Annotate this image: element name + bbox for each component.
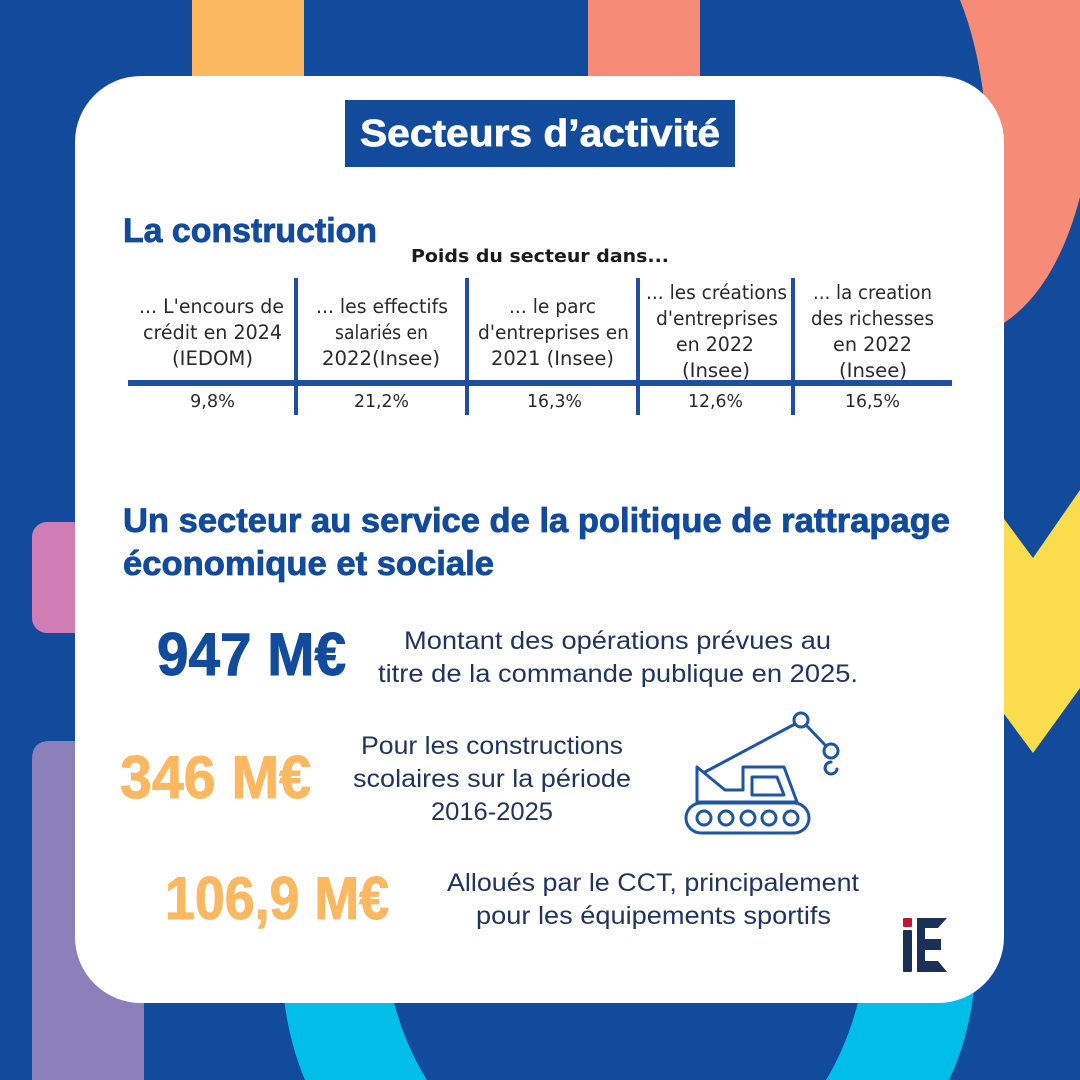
heading: La construction: La construction <box>123 212 377 250</box>
column 4 <box>646 281 787 412</box>
heading: politique de rattrapage <box>123 502 950 583</box>
panel: white card <box>75 76 1004 1003</box>
stat: 106,9 M€: 106,9 M€ <box>165 865 389 932</box>
column 1: (IEDOM) <box>172 347 253 370</box>
table rules <box>128 278 952 415</box>
column 5: (Insee) <box>839 359 907 382</box>
text: constructions scolaires: Pour les constructions <box>361 732 623 760</box>
column 1: crédit en 2024 <box>143 321 282 344</box>
text: constructions scolaires <box>353 732 631 826</box>
text: CCT: pour les équipements sportifs <box>476 902 831 930</box>
column 4: ... les créations <box>646 281 787 304</box>
stat: 947 M€: 947 M€ <box>157 621 346 688</box>
title: Secteurs d’activité <box>360 113 720 155</box>
text: CCT <box>447 869 859 930</box>
column 4: 12,6% <box>688 391 743 412</box>
column 2: 2022(Insee) <box>322 347 440 370</box>
table: poids du secteur <box>128 246 952 415</box>
text: commande publique <box>378 627 858 688</box>
column 2: ... les effectifs <box>316 295 448 318</box>
text: commande publique: titre de la commande publique en 2025. <box>378 660 858 688</box>
column 5 <box>811 281 934 412</box>
text: commande publique: Montant des opérations prévues au <box>404 627 831 655</box>
heading: politique de rattrapage: Un secteur au service de la politique de rattrapage <box>123 502 950 540</box>
column 5: ... la creation <box>813 281 932 304</box>
column 4: en 2022 <box>676 333 754 356</box>
column 1: ... L'encours de <box>139 295 284 318</box>
stat: 346 M€: 346 M€ <box>120 744 311 811</box>
column 3: 16,3% <box>527 391 582 412</box>
text: constructions scolaires: scolaires sur la période <box>353 765 631 793</box>
column 5: en 2022 <box>833 333 912 356</box>
column 3 <box>478 295 629 412</box>
table title: Poids du secteur dans... <box>411 246 669 267</box>
column 4: (Insee) <box>682 359 750 382</box>
column 1: 9,8% <box>190 391 235 412</box>
text: constructions scolaires: 2016-2025 <box>431 798 553 826</box>
column 5: des richesses <box>811 307 934 330</box>
column 4: d'entreprises <box>656 307 778 330</box>
text: CCT: Alloués par le CCT, principalement <box>447 869 859 897</box>
column 5: 16,5% <box>845 391 900 412</box>
column 2: 21,2% <box>354 391 409 412</box>
logo: iE <box>903 918 947 972</box>
column 2 <box>316 295 448 412</box>
column 3: ... le parc <box>509 295 596 318</box>
column 2: salariés en <box>335 321 428 344</box>
column 3: d'entreprises en <box>478 321 629 344</box>
column 1 <box>139 295 284 412</box>
column 3: 2021 (Insee) <box>491 347 614 370</box>
heading: politique de rattrapage: économique et sociale <box>123 545 494 583</box>
title <box>345 100 735 167</box>
icon: crane <box>686 713 838 833</box>
